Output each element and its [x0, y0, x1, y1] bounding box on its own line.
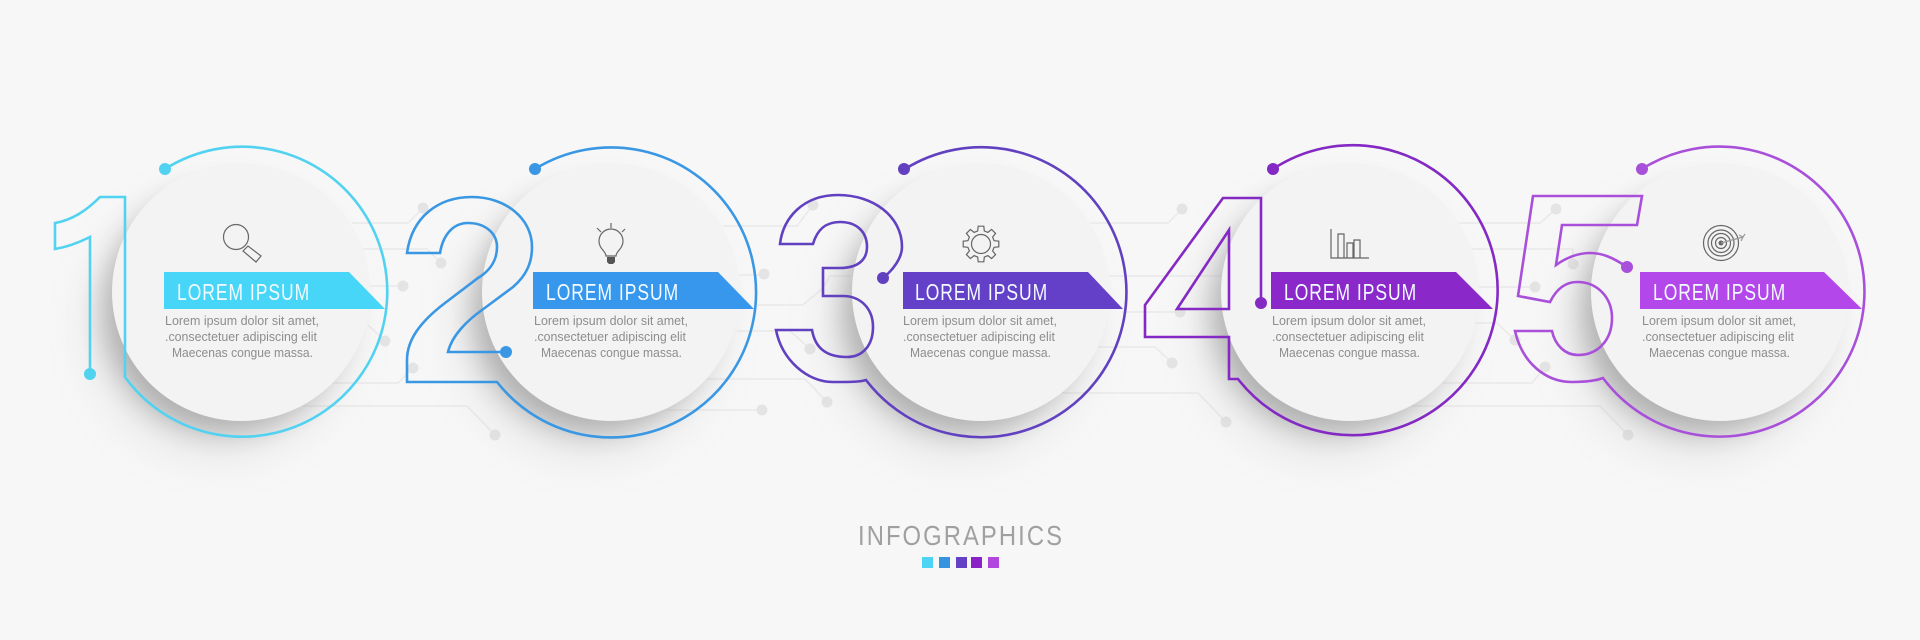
body text	[903, 313, 1057, 360]
icon: bar chart	[1331, 229, 1369, 258]
body text: .consectetuer adipiscing elit	[1642, 329, 1794, 344]
body text: Maecenas congue massa.	[1279, 345, 1420, 360]
body text: Lorem ipsum dolor sit amet,	[903, 313, 1057, 328]
body text: Maecenas congue massa.	[541, 345, 682, 360]
body text: .consectetuer adipiscing elit	[1272, 329, 1424, 344]
panel: step 1	[55, 147, 387, 444]
panel: step 2	[407, 147, 756, 444]
banner	[164, 272, 385, 309]
banner label: LOREM IPSUM	[177, 281, 310, 306]
banner	[1640, 272, 1862, 309]
numeral 1 and ring	[55, 147, 387, 437]
body text: .consectetuer adipiscing elit	[534, 329, 686, 344]
body text: Maecenas congue massa.	[1649, 345, 1790, 360]
body text: .consectetuer adipiscing elit	[165, 329, 317, 344]
banner	[1271, 272, 1493, 309]
body text	[1272, 313, 1426, 360]
numeral 3 and ring	[776, 147, 1126, 437]
body text	[1642, 313, 1796, 360]
icon: magnifier	[224, 224, 261, 262]
panel: step 3	[776, 147, 1126, 444]
body text: Lorem ipsum dolor sit amet,	[1642, 313, 1796, 328]
banner	[903, 272, 1123, 309]
icon: target	[1704, 226, 1745, 260]
body text: Maecenas congue massa.	[910, 345, 1051, 360]
body text: Lorem ipsum dolor sit amet,	[534, 313, 688, 328]
numeral 5 and ring	[1515, 147, 1864, 437]
banner label: LOREM IPSUM	[546, 281, 679, 306]
icon: gear	[963, 226, 999, 262]
body text	[165, 313, 319, 360]
panel: step 4	[1145, 145, 1498, 444]
banner label: LOREM IPSUM	[915, 281, 1048, 306]
icon: light bulb	[597, 223, 625, 264]
circuit line pattern	[303, 200, 1634, 440]
numeral 2 and ring	[407, 147, 756, 437]
banner label: LOREM IPSUM	[1653, 281, 1786, 306]
panel: step 5	[1515, 147, 1864, 444]
body text	[534, 313, 688, 360]
numeral 4 and ring	[1145, 145, 1498, 435]
body text: Maecenas congue massa.	[172, 345, 313, 360]
title: INFOGRAPHICS	[858, 519, 1064, 551]
legend squares	[922, 557, 999, 568]
body text: Lorem ipsum dolor sit amet,	[165, 313, 319, 328]
body text: Lorem ipsum dolor sit amet,	[1272, 313, 1426, 328]
body text: .consectetuer adipiscing elit	[903, 329, 1055, 344]
banner label: LOREM IPSUM	[1284, 281, 1417, 306]
banner	[533, 272, 754, 309]
